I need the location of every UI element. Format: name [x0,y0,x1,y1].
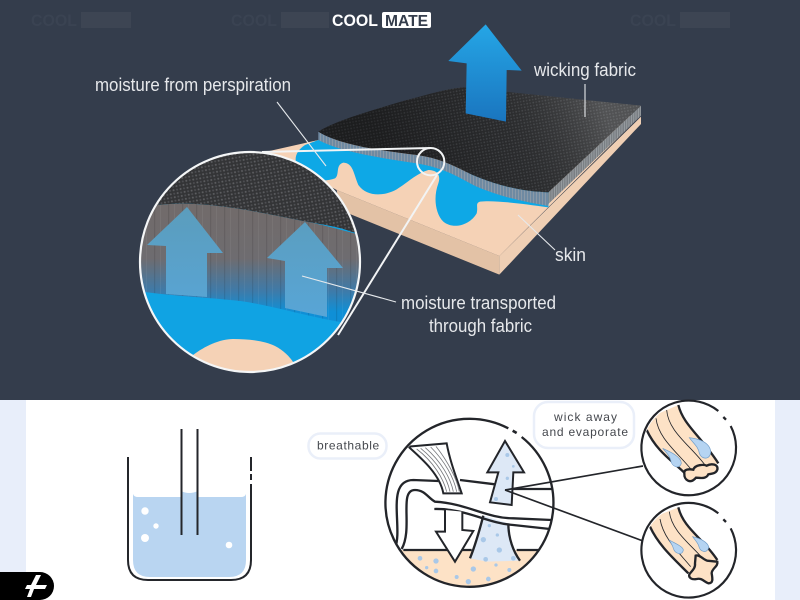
label bubble: breathable [308,434,386,458]
faint watermark logos: COOL [630,12,676,30]
skin layer [402,550,536,586]
magnified fabric circle [138,150,362,374]
label bubble: wick away and evaporate: wick away [553,410,617,424]
leader lines [277,84,585,302]
connector lines [505,466,643,541]
sweat gland column [470,516,520,562]
magnified fabric surface [157,153,355,233]
logo: COOL MATE: COOL [332,12,378,30]
label: moisture transported through fabric [401,292,556,336]
skin block side faces [337,117,641,275]
fabric and skin outlines [395,480,555,561]
faint watermark logos: COOL [231,12,277,30]
moisture blue blobs [296,140,550,226]
large circle: skin and fabric cross-section [383,419,643,593]
magnified fibres [141,204,359,322]
magnifier connecting lines [262,148,437,335]
right translucent arrow [267,222,343,317]
fibre tuft [408,443,462,493]
upward moisture arrow [487,441,524,505]
label bubble: breathable: breathable [317,438,380,452]
faint watermark logos: COOL [31,12,77,30]
right side strip [775,400,800,600]
small circles: fingertip details [641,401,736,598]
top fingertip with rounded nail [641,401,736,495]
dark top panel background [0,0,800,400]
circle outline [385,419,553,587]
skin droplets [418,556,511,584]
label: skin: skin [555,244,586,265]
label: moisture from perspiration: moisture from perspiration [95,74,291,95]
label: wicking fabric: wicking fabric [533,59,636,80]
label bubble: wick away and evaporate: and evaporate [542,425,628,439]
blue upward arrow [448,24,522,122]
3D fabric and skin diagram [267,24,641,275]
magnified skin [193,339,293,371]
fabric front edge [318,132,548,206]
skin top surface [267,115,641,256]
left translucent arrow [147,207,223,297]
label bubble: wick away and evaporate [534,402,634,448]
logo: COOL MATE: MATE [385,13,428,30]
fabric top surface [318,87,641,192]
beaker with capillary tube [128,429,251,580]
left side strip [0,400,26,600]
logo: COOL MATE [332,12,431,30]
faint watermark logos [31,12,730,30]
bottom fingertip with star nail [641,503,736,598]
bottom white panel [0,400,800,600]
label: moisture transported through fabric: through fabric [429,315,532,336]
black badge with icon [0,572,54,600]
small magnifier ring [417,148,444,175]
downward air arrow [436,510,473,562]
label: moisture transported through fabric: moisture transported [401,292,556,313]
fabric right edge [548,106,641,204]
